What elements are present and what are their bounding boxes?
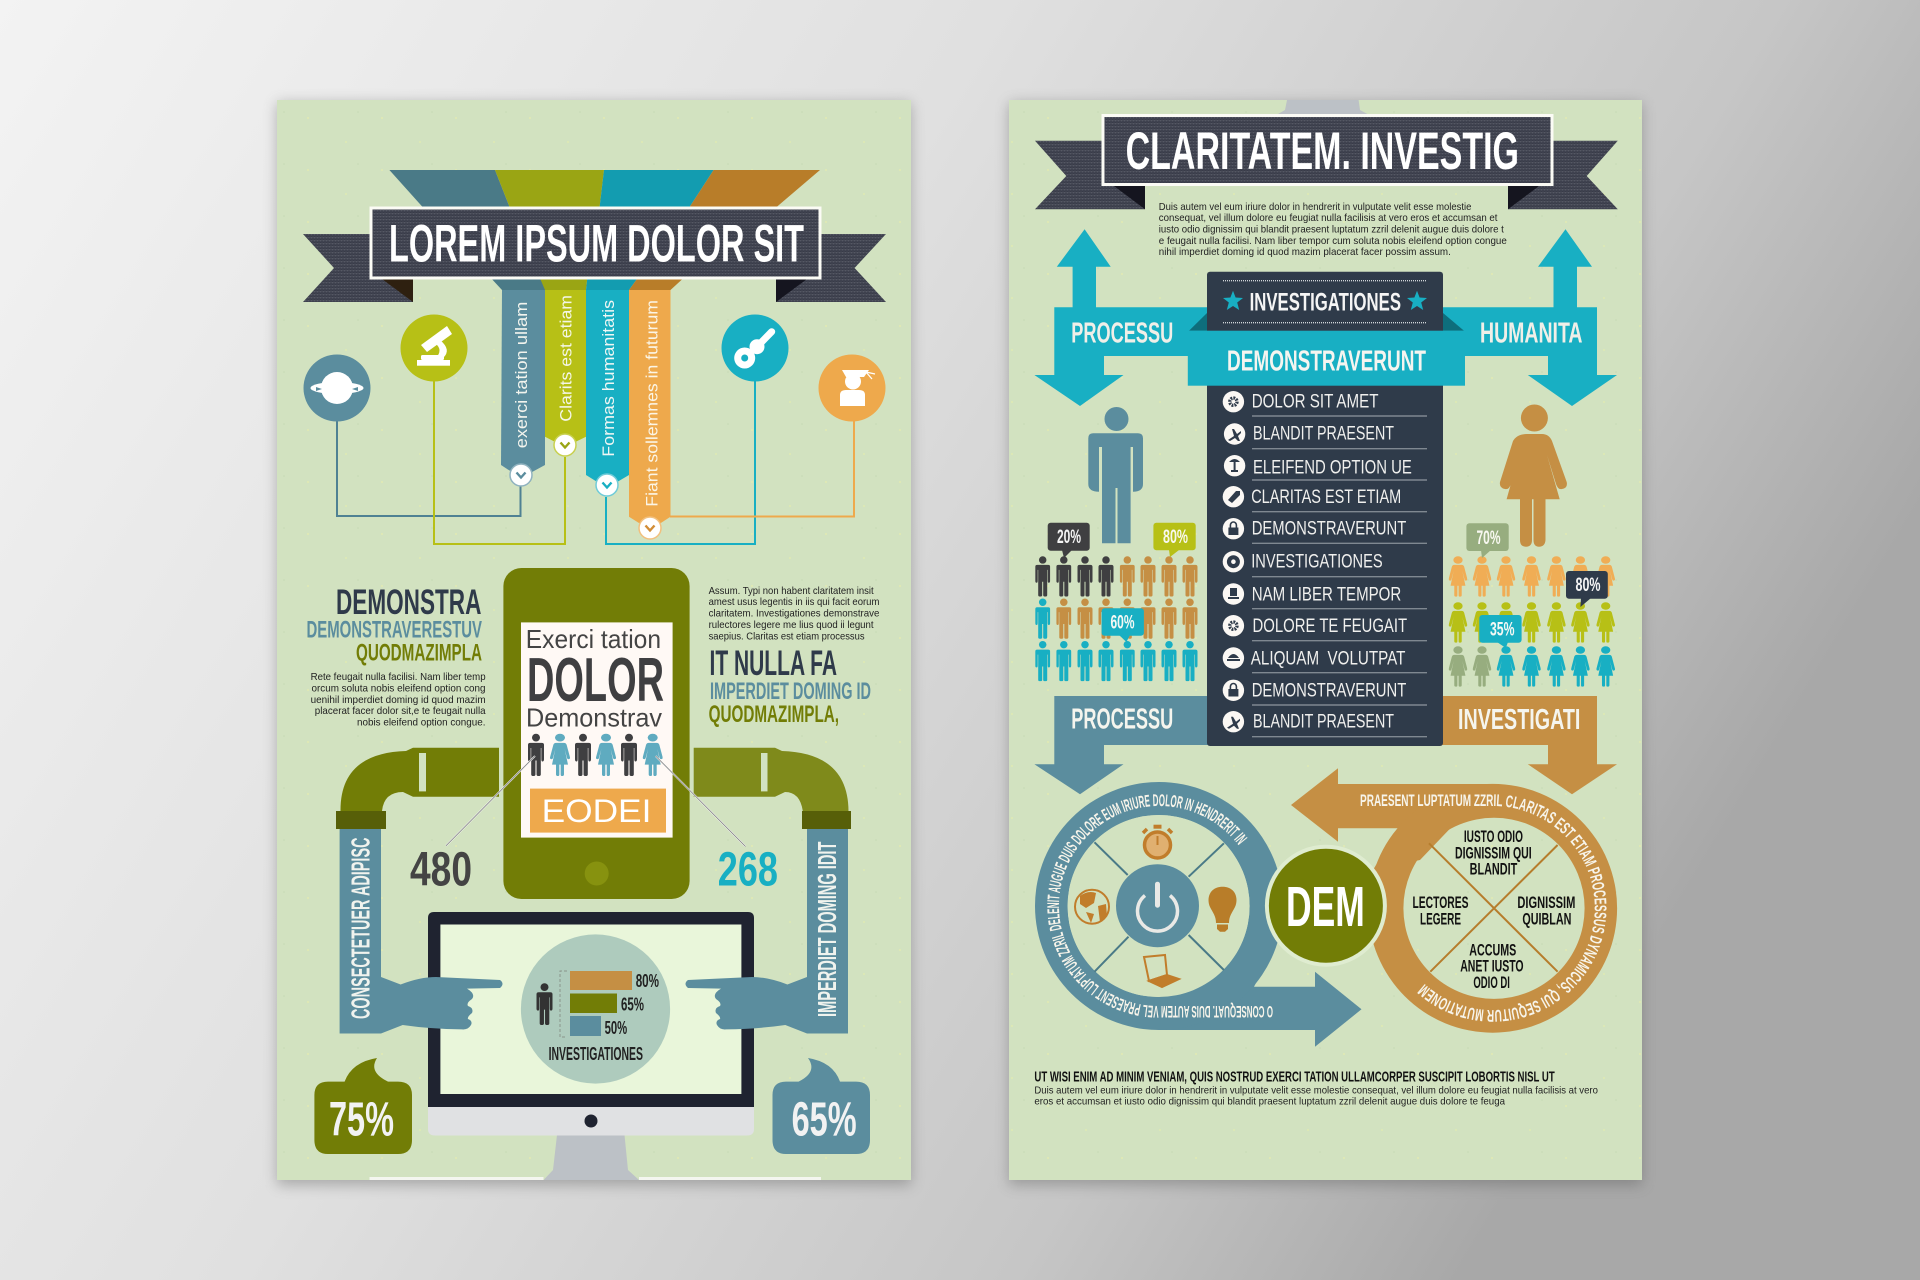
heading block: DEMONSTRA: DEMONSTRA bbox=[336, 583, 481, 622]
quadrant text: left: LEGERE bbox=[1420, 910, 1461, 929]
icon: power button bbox=[1116, 864, 1199, 947]
callout: 80% green bbox=[1153, 523, 1196, 557]
callout: 20%: 20% bbox=[1057, 527, 1081, 548]
text block: right paragraph: Assum. Typi non habent claritatem insit bbox=[709, 585, 874, 597]
connector lines from icons to ribbons bbox=[337, 380, 854, 544]
list item: NAM LIBER TEMPOR: NAM LIBER TEMPOR bbox=[1252, 584, 1401, 605]
ribbon: exerci tation ullam bbox=[492, 279, 545, 486]
list item: DEMONSTRAVERUNT bbox=[1223, 518, 1407, 540]
heading block: IT NULLA FA bbox=[709, 644, 871, 728]
icon: graduate bbox=[818, 354, 886, 422]
quadrant text: right: QUIBLAN bbox=[1522, 910, 1571, 929]
ring text: slate: O CONSEQUAT. DUIS AUTEM VEL PRAESENT LUPTATUM ZZRIL DELENIT AUGUE DUIS DOLORE EUM IRIURE DOLOR IN HENDRERIT IN bbox=[1047, 794, 1273, 1018]
heading block: IT NULLA FA: IT NULLA FA bbox=[710, 644, 837, 683]
text block: intro paragraph: nihil imperdiet doming id quod mazim placerat facer possim assum. bbox=[1159, 246, 1451, 258]
monitor bbox=[370, 912, 821, 1180]
pipe and sleeve: left bbox=[336, 748, 499, 1034]
hand pointing left bbox=[686, 977, 807, 1034]
chart: investigationes bars: 65% bbox=[621, 994, 644, 1014]
panel: right poster bbox=[1009, 100, 1642, 1180]
quadrant text: top: BLANDIT bbox=[1470, 860, 1518, 879]
callout: 70% bbox=[1466, 523, 1509, 558]
phone: Exerci tation bbox=[526, 624, 661, 654]
callout: 60%: 60% bbox=[1110, 612, 1135, 634]
icon: guitar bbox=[722, 314, 788, 382]
list item: ALIQUAM VOLUTPAT bbox=[1223, 647, 1406, 669]
text block: intro paragraph bbox=[1159, 201, 1507, 258]
list item: BLANDIT PRAESENT repeat bbox=[1223, 711, 1394, 733]
list item: INVESTIGATIONES bbox=[1223, 551, 1383, 573]
ribbon: Clarits est etiam bbox=[540, 279, 587, 456]
quadrant text: top: DIGNISSIM QUI bbox=[1455, 843, 1532, 862]
quadrant text: bottom: ODIO DI bbox=[1473, 973, 1510, 992]
arrow set: cyan left bbox=[1034, 229, 1210, 406]
speech bubble: 75% bbox=[314, 1058, 412, 1154]
callout: 80% dark: 80% bbox=[1576, 575, 1601, 596]
heading: INVESTIGATIONES with stars: INVESTIGATIONES bbox=[1250, 289, 1401, 317]
pictogram grid: women bbox=[1449, 556, 1615, 687]
figure: large woman bbox=[1500, 404, 1567, 547]
arrow set: cyan left: PROCESSU bbox=[1071, 318, 1173, 350]
icon: microscope bbox=[400, 314, 468, 382]
centre badge: DEM: DEM bbox=[1286, 875, 1365, 939]
icon: stopwatch bbox=[1143, 825, 1172, 858]
ribbon: Formas humanitatis: Formas humanitatis bbox=[599, 300, 618, 457]
text block: footer note bbox=[1034, 1069, 1598, 1108]
chart: investigationes bars: 50% bbox=[605, 1018, 627, 1038]
callout: 35% bbox=[1479, 615, 1522, 648]
pipe and sleeve: right bbox=[694, 748, 851, 1034]
list item: BLANDIT PRAESENT bbox=[1224, 423, 1394, 445]
arrow: slate left, PROCESSU: PROCESSU bbox=[1071, 703, 1173, 735]
text block: intro paragraph: Duis autem vel eum iriure dolor in hendrerit in vulputate velit esse molestie bbox=[1159, 201, 1472, 213]
quadrant text: left bbox=[1412, 893, 1468, 929]
phone: DOLOR bbox=[527, 646, 664, 715]
speech bubble: 65%: 65% bbox=[792, 1094, 857, 1146]
callout: 20% bbox=[1048, 523, 1090, 558]
ribbon: Clarits est etiam: Clarits est etiam bbox=[556, 295, 575, 422]
heading block: DEMONSTRA: QUODMAZIMPLA bbox=[356, 639, 482, 666]
text block: intro paragraph: consequat, vel illum dolore eu feugiat nulla facilisis at vero eros et accumsan et bbox=[1159, 212, 1498, 224]
arrow: slate left, PROCESSU bbox=[1034, 696, 1210, 794]
text block: right paragraph: amest usus legentis in iis qui facit eorum bbox=[709, 596, 880, 608]
quadrant text: right: DIGNISSIM bbox=[1517, 893, 1575, 912]
funnel of four coloured bands bbox=[389, 170, 820, 207]
list item: NAM LIBER TEMPOR bbox=[1223, 583, 1401, 605]
text block: right paragraph: rulectores legere me lius quod ii legunt bbox=[709, 619, 874, 631]
ribbon: Fiant sollemnes in futurum bbox=[629, 279, 682, 539]
speech bubble: 75%: 75% bbox=[329, 1094, 394, 1146]
ribbon: Formas humanitatis bbox=[586, 279, 637, 496]
centre badge: DEM bbox=[1265, 845, 1387, 967]
text block: footer note: Duis autem vel eum iriure dolor in hendrerit in vulputate velit esse molestie consequat, vel illum dolore eu feugiat nulla facilisis at vero bbox=[1034, 1084, 1598, 1096]
list item: DEMONSTRAVERUNT repeat: DEMONSTRAVERUNT bbox=[1252, 680, 1407, 701]
leader lines from figures to totals bbox=[446, 756, 746, 846]
list item: DOLOR SIT AMET: DOLOR SIT AMET bbox=[1252, 392, 1379, 413]
text block: right paragraph bbox=[709, 585, 880, 642]
callout: 80% green: 80% bbox=[1163, 527, 1188, 548]
pipe and sleeve: right: IMPERDIET DOMING IDIT bbox=[812, 842, 842, 1017]
list item: ELEIFEND OPTION UE: ELEIFEND OPTION UE bbox=[1253, 458, 1412, 479]
heading block: DEMONSTRA: DEMONSTRAVERESTUV bbox=[306, 616, 482, 644]
list item: DEMONSTRAVERUNT repeat bbox=[1223, 680, 1407, 701]
phone: EODEI bbox=[542, 793, 651, 829]
pictogram grid: men bbox=[1035, 556, 1198, 681]
icon: globe bbox=[1075, 890, 1109, 924]
ribbon: Fiant sollemnes in futurum: Fiant sollemnes in futurum bbox=[643, 300, 662, 507]
ribbon: DEMONSTRAVERUNT bbox=[1188, 331, 1465, 386]
callout: 80% dark bbox=[1566, 571, 1608, 607]
arrow set: cyan right bbox=[1440, 229, 1617, 406]
icon: planet bbox=[304, 354, 370, 422]
text block: footer note: UT WISI ENIM AD MINIM VENIAM, QUIS NOSTRUD EXERCI TATION ULLAMCORPER SUSCIPIT LOBORTIS NISL UT bbox=[1034, 1069, 1555, 1086]
list item: CLARITAS EST ETIAM bbox=[1223, 486, 1401, 508]
text block: intro paragraph: iusto odio dignissim qui blandit praesent luptatum zzril delenit augue duis dolore t bbox=[1159, 224, 1504, 236]
list item: DOLORE TE FEUGAIT: DOLORE TE FEUGAIT bbox=[1252, 616, 1407, 637]
text block: left paragraph bbox=[311, 671, 486, 729]
chart: investigationes bars bbox=[521, 934, 670, 1084]
circular arrow: slate ring bbox=[1035, 782, 1362, 1047]
quadrant text: bottom bbox=[1460, 940, 1524, 992]
figure: large man bbox=[1088, 407, 1143, 543]
quadrant text: top bbox=[1455, 827, 1532, 879]
list item: CLARITAS EST ETIAM: CLARITAS EST ETIAM bbox=[1251, 487, 1401, 508]
panel: left poster bbox=[277, 100, 911, 1180]
stat: 268: 268 bbox=[718, 844, 778, 897]
ring text: ochre: PRAESENT LUPTATUM ZZRIL CLARITAS EST ETIAM PROCESSUS DYNAMICUS, QUI SEQUITUR MUTATIONEM bbox=[1360, 794, 1607, 1022]
text block: left paragraph: placerat facer dolor sit,e te feugait nulla bbox=[315, 705, 486, 717]
ribbon: DEMONSTRAVERUNT: DEMONSTRAVERUNT bbox=[1227, 346, 1426, 378]
phone: Demonstrav bbox=[526, 702, 662, 732]
title banner: LOREM IPSUM DOLOR SIT: LOREM IPSUM DOLOR SIT bbox=[389, 215, 804, 274]
callout: 70%: 70% bbox=[1476, 528, 1501, 549]
panel: dark list column bbox=[1188, 272, 1465, 746]
callout: 60% bbox=[1102, 608, 1144, 642]
hand pointing right bbox=[381, 977, 502, 1034]
text block: left paragraph: orcum soluta nobis eleifend option cong bbox=[312, 682, 486, 694]
text block: right paragraph: saepius. Claritas est etiam processus bbox=[709, 630, 865, 642]
quadrant text: top: IUSTO ODIO bbox=[1464, 827, 1523, 846]
list item: DEMONSTRAVERUNT: DEMONSTRAVERUNT bbox=[1252, 519, 1407, 540]
title banner: LOREM IPSUM DOLOR SIT bbox=[303, 208, 886, 302]
list item: BLANDIT PRAESENT repeat: BLANDIT PRAESENT bbox=[1253, 712, 1394, 733]
arrow set: cyan right: HUMANITA bbox=[1480, 318, 1583, 350]
quadrant text: left: LECTORES bbox=[1412, 893, 1468, 912]
callout: 35%: 35% bbox=[1490, 620, 1515, 640]
arrow: ochre right, INVESTIGATI: INVESTIGATI bbox=[1458, 704, 1580, 736]
icon: laptop bbox=[1144, 955, 1179, 987]
title banner: CLARITATEM. INVESTIG: CLARITATEM. INVESTIG bbox=[1126, 122, 1519, 181]
text block: left paragraph: nobis eleifend option congue. bbox=[357, 717, 486, 729]
heading block: IT NULLA FA: QUODMAZIMPLA, bbox=[709, 701, 839, 728]
stat: 480: 480 bbox=[410, 844, 472, 897]
text block: left paragraph: Rete feugait nulla facilisi. Nam liber temp bbox=[311, 671, 486, 683]
heading block: IT NULLA FA: IMPERDIET DOMING ID bbox=[710, 678, 871, 705]
pipe and sleeve: left: CONSECTETUER ADIPISC bbox=[346, 837, 376, 1019]
list item: DOLORE TE FEUGAIT bbox=[1223, 615, 1407, 637]
phone bbox=[503, 568, 690, 899]
text block: intro paragraph: e feugait nulla facilisi. Nam liber tempor cum soluta nobis eleifend option congue bbox=[1159, 235, 1507, 247]
circular arrow: ochre ring bbox=[1291, 768, 1618, 1033]
chart: investigationes bars: 80% bbox=[636, 971, 659, 991]
ribbon: exerci tation ullam: exerci tation ullam bbox=[512, 302, 531, 448]
arrow: ochre right, INVESTIGATI bbox=[1440, 696, 1617, 794]
heading block: DEMONSTRA bbox=[306, 583, 482, 666]
text block: left paragraph: uenihil imperdiet doming id quod mazim bbox=[311, 694, 486, 706]
speech bubble: 65% bbox=[772, 1058, 870, 1154]
list item: BLANDIT PRAESENT: BLANDIT PRAESENT bbox=[1253, 424, 1394, 445]
chart: investigationes bars: INVESTIGATIONES bbox=[549, 1044, 643, 1064]
icon: light bulb bbox=[1209, 887, 1236, 932]
list item: DOLOR SIT AMET bbox=[1223, 391, 1379, 413]
quadrant text: bottom: ANET IUSTO bbox=[1460, 956, 1524, 975]
quadrant text: bottom: ACCUMS bbox=[1469, 940, 1516, 959]
text block: right paragraph: claritatem. Investigationes demonstrave bbox=[709, 608, 880, 620]
title banner: CLARITATEM. INVESTIG bbox=[1035, 116, 1618, 209]
list item: ELEIFEND OPTION UE bbox=[1224, 455, 1412, 479]
text block: footer note: eros et accumsan et iusto odio dignissim qui blandit praesent luptatum zzril delenit augue duis dolore te feuga bbox=[1034, 1096, 1505, 1108]
list item: ALIQUAM VOLUTPAT: ALIQUAM VOLUTPAT bbox=[1251, 648, 1406, 669]
quadrant text: right bbox=[1517, 893, 1575, 929]
list item: INVESTIGATIONES: INVESTIGATIONES bbox=[1251, 552, 1383, 573]
